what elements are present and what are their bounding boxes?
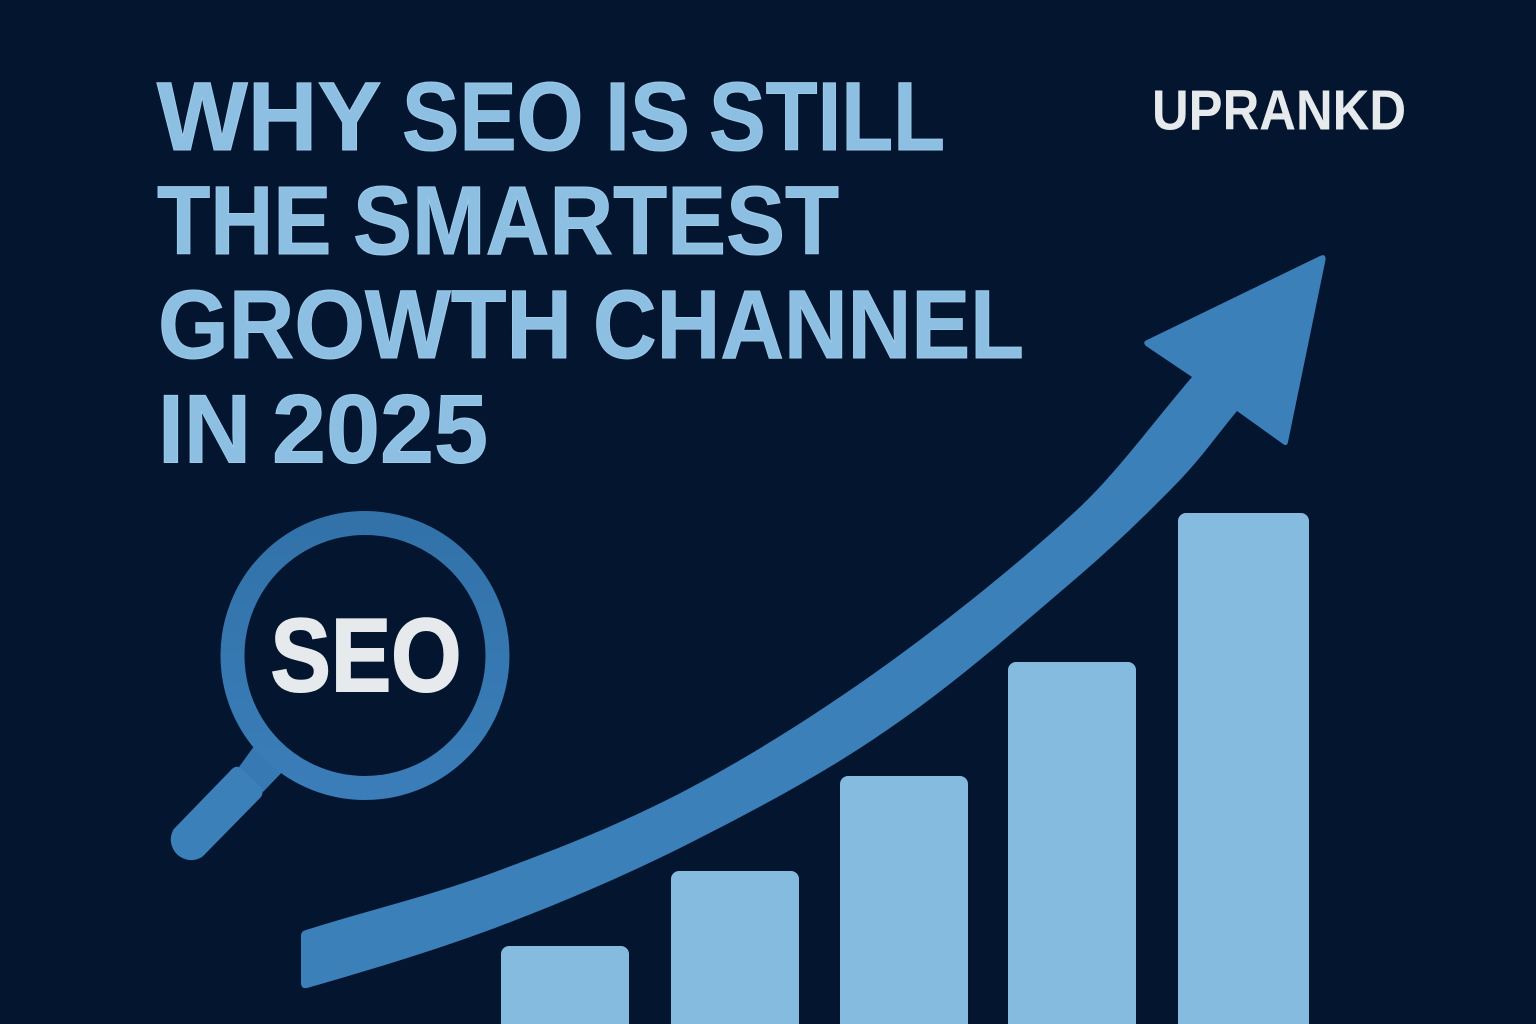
title: CHANNEL	[593, 270, 1024, 379]
title: 2025	[272, 374, 488, 484]
magnifier label: SEO	[270, 598, 462, 714]
magnifier neck	[239, 738, 288, 792]
magnifier handle	[171, 767, 263, 860]
title: SMARTEST	[353, 166, 839, 275]
bar chart	[501, 513, 1309, 1024]
magnifier ring	[232, 523, 498, 788]
title: IN	[158, 374, 251, 484]
icon: magnifying glass	[171, 523, 498, 860]
title	[157, 62, 1024, 484]
brand logo: UPRANKD	[1152, 78, 1406, 142]
title: SEO	[402, 62, 584, 171]
title: GROWTH	[158, 270, 572, 379]
title: WHY	[157, 62, 382, 171]
growth arrow	[301, 255, 1326, 988]
title: STILL	[709, 62, 945, 171]
title: IS	[605, 62, 690, 171]
title: THE	[157, 166, 332, 275]
